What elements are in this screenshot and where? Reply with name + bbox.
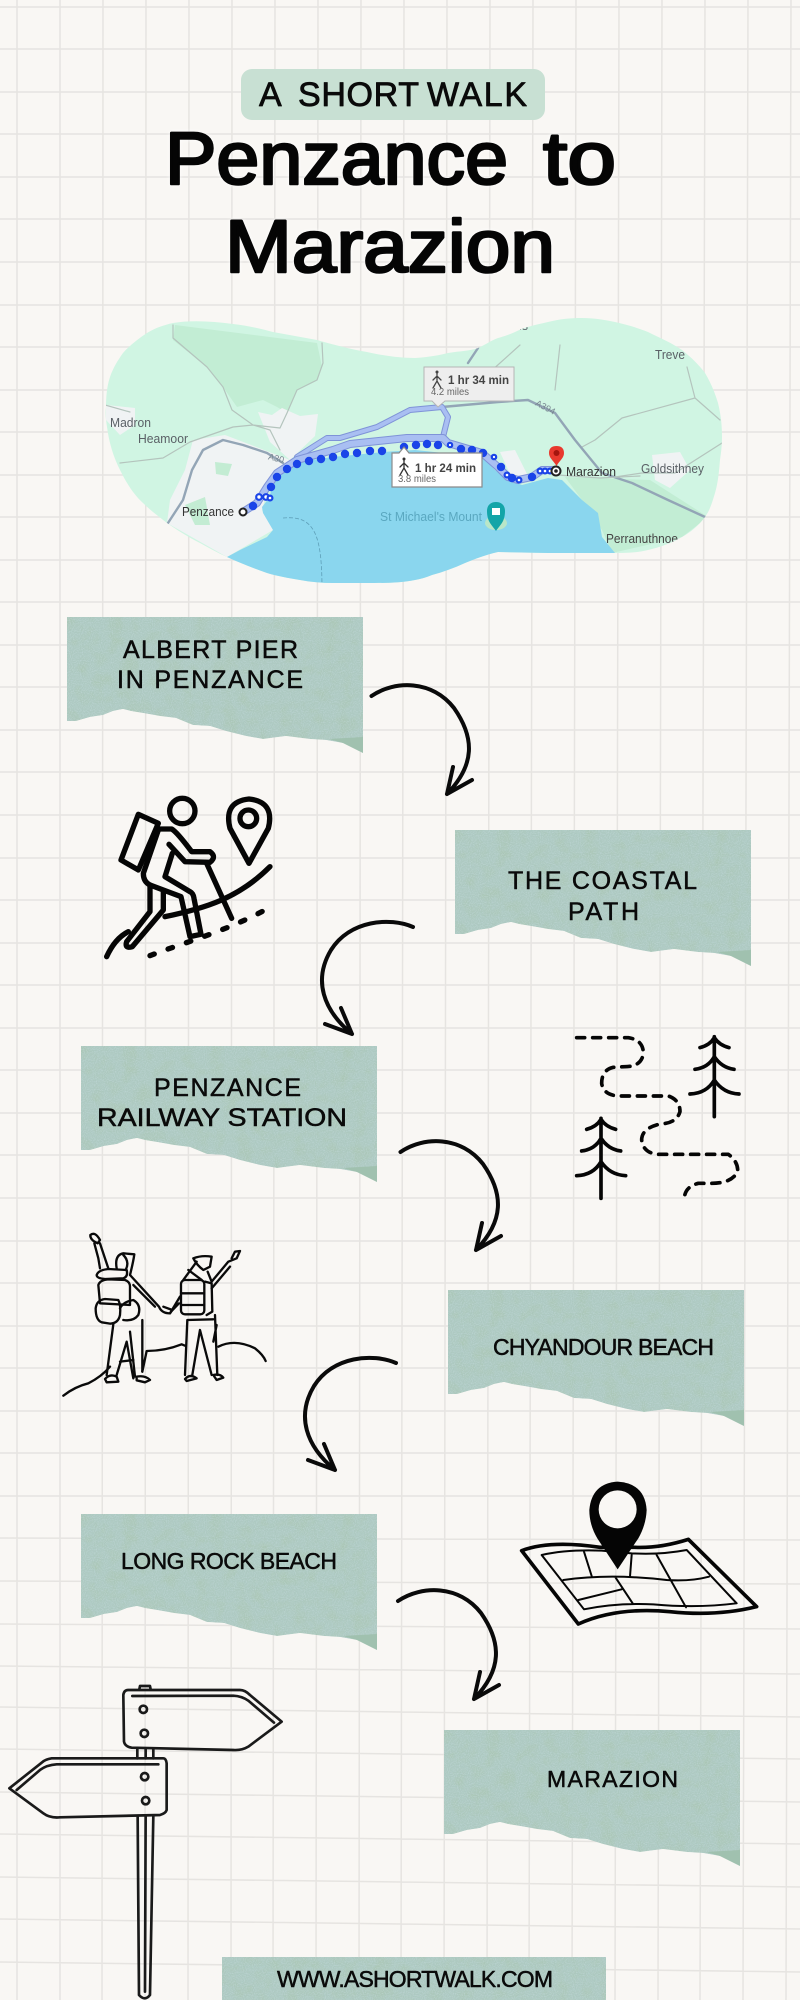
map label: Penzance: Penzance [182, 504, 234, 519]
title [165, 117, 616, 288]
title: Penzance [165, 117, 508, 200]
callout: 1 hr 24 min selected route: 1 hr 24 min [415, 461, 476, 475]
step 5: Long Rock Beach: LONG ROCK BEACH [121, 1548, 337, 1574]
footer: website: WWW.ASHORTWALK.COM [277, 1966, 553, 1992]
icon: folded map with location pin [522, 1482, 757, 1624]
step 3: Penzance Railway Station: PENZANCE [154, 1074, 301, 1102]
map: route from Penzance to Marazion: Goldsithney [641, 461, 704, 476]
callout: 1 hr 24 min selected route [392, 447, 482, 487]
step 1: Albert Pier in Penzance: IN PENZANCE [117, 666, 303, 694]
arrow: step 4 to step 5 [305, 1358, 396, 1470]
arrow: step 1 to step 2 [372, 685, 472, 794]
step 4: Chyandour Beach: CHYANDOUR BEACH [493, 1334, 714, 1360]
callout: 1 hr 34 min alternate route [424, 367, 514, 407]
map: route from Penzance to Marazion: A394 [534, 398, 557, 417]
map: route from Penzance to Marazion: Treve [655, 347, 685, 362]
callout: 1 hr 34 min alternate route: 4.2 miles [431, 387, 469, 398]
map: route from Penzance to Marazion: Perranuthnoe [606, 531, 678, 546]
arrow: step 5 to step 6 [398, 1590, 499, 1699]
icon: winding trail with pine trees [577, 1037, 739, 1198]
footer: website [222, 1957, 606, 2000]
icon: hiker with location pin [107, 798, 270, 957]
step 2: The Coastal Path: PATH [568, 898, 639, 926]
map: route from Penzance to Marazion: Madron [110, 415, 151, 430]
step 3: Penzance Railway Station: RAILWAY STATION [97, 1104, 347, 1132]
map: route from Penzance to Marazion: A30 [267, 451, 285, 465]
map: route from Penzance to Marazion [106, 318, 722, 583]
map label: Marazion with red pin: Marazion [566, 464, 616, 479]
step 2: The Coastal Path [455, 830, 751, 966]
step 1: Albert Pier in Penzance [67, 617, 363, 753]
title: Marazion [225, 205, 555, 288]
icon: wooden signpost [9, 1686, 282, 1998]
arrow: step 3 to step 4 [400, 1141, 501, 1250]
step 2: The Coastal Path: THE COASTAL [508, 867, 697, 895]
step 4: Chyandour Beach [448, 1290, 744, 1426]
subtitle chip: A [259, 76, 282, 114]
title: to [543, 117, 616, 200]
step 6: Marazion: MARAZION [547, 1766, 678, 1792]
callout: 1 hr 34 min alternate route: 1 hr 34 min [448, 373, 509, 387]
step 5: Long Rock Beach [81, 1514, 377, 1650]
map landmark: St Michael's Mount pin [485, 502, 507, 531]
map: route from Penzance to Marazion: us [515, 318, 528, 333]
subtitle chip [241, 69, 545, 120]
step 3: Penzance Railway Station [81, 1046, 377, 1182]
step 6: Marazion [444, 1730, 740, 1866]
icon: two hikers holding hands [63, 1234, 266, 1396]
subtitle chip: SHORT [298, 76, 419, 114]
step 1: Albert Pier in Penzance: ALBERT PIER [123, 636, 298, 664]
map: route from Penzance to Marazion: St Michael's Mount [380, 509, 482, 524]
subtitle chip: WALK [427, 76, 527, 114]
map label: Marazion with red pin [549, 446, 616, 479]
map: route from Penzance to Marazion: Heamoor [138, 431, 189, 446]
callout: 1 hr 24 min selected route: 3.8 miles [398, 474, 436, 485]
arrow: step 2 to step 3 [322, 922, 413, 1034]
